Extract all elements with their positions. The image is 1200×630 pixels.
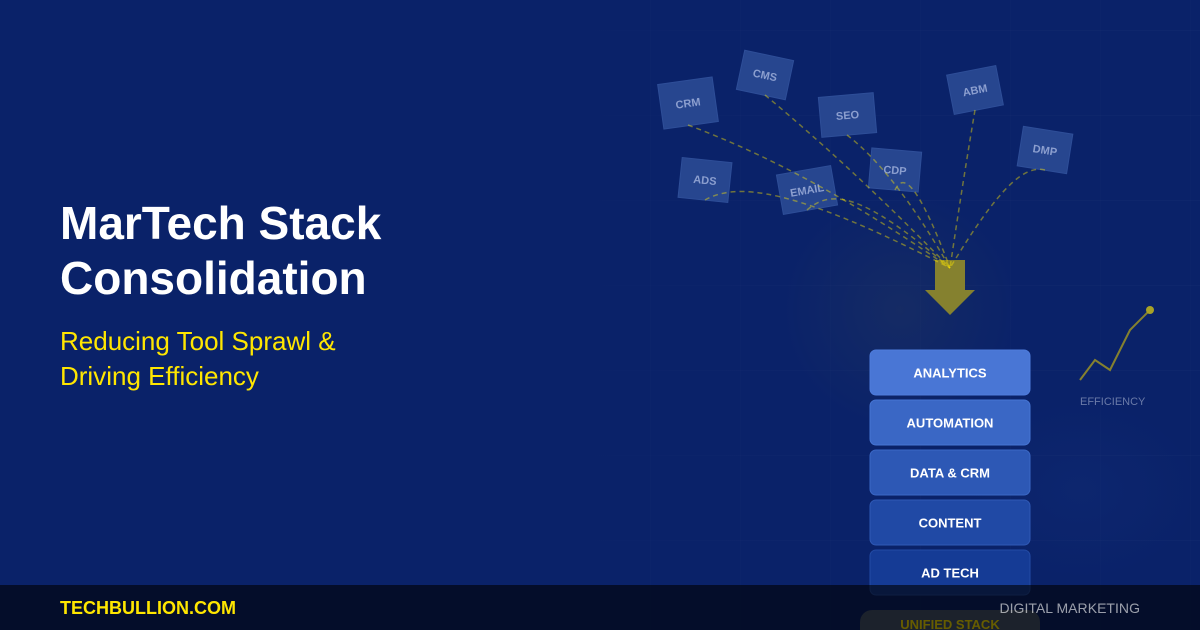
layer: DATA & CRM: DATA & CRM — [910, 466, 990, 480]
layer: ANALYTICS: ANALYTICS — [913, 366, 987, 380]
tag: SEO — [818, 93, 877, 137]
tag: SEO: SEO — [835, 109, 860, 123]
tag: ABM — [947, 66, 1003, 114]
tag: EMAIL: EMAIL — [789, 182, 825, 200]
tag: EMAIL — [776, 166, 838, 214]
subtitle: Driving Efficiency — [60, 361, 259, 391]
tag: ADS — [678, 157, 732, 203]
layer: CONTENT: CONTENT — [919, 516, 981, 530]
badge: UNIFIED STACK — [860, 610, 1040, 630]
icon: consolidation arrow — [925, 260, 975, 315]
title: Consolidation — [60, 252, 367, 304]
title: MarTech Stack — [60, 197, 381, 249]
tag: CRM: CRM — [675, 96, 701, 112]
tool tags scattered — [658, 50, 1073, 214]
category label: DIGITAL MARKETING — [999, 600, 1140, 616]
chart: efficiency trend: EFFICIENCY — [1080, 396, 1146, 408]
tag: DMP: DMP — [1032, 143, 1058, 159]
layer: CONTENT — [870, 500, 1030, 545]
footer bar — [0, 585, 1200, 630]
tag: DMP — [1017, 126, 1073, 174]
layer: ANALYTICS — [870, 350, 1030, 395]
layer: DATA & CRM — [870, 450, 1030, 495]
subtitle — [60, 326, 336, 391]
layer: AD TECH — [870, 550, 1030, 595]
tag: CDP: CDP — [883, 164, 907, 178]
tag: CDP — [868, 148, 922, 192]
layer: AUTOMATION — [870, 400, 1030, 445]
tag: CRM — [658, 77, 718, 129]
chart: efficiency trend — [1080, 306, 1154, 408]
layer: AUTOMATION: AUTOMATION — [907, 416, 993, 430]
dashed connector lines — [688, 95, 1045, 268]
subtitle: Reducing Tool Sprawl & — [60, 326, 336, 356]
tag: CMS: CMS — [752, 68, 778, 84]
tag: ABM: ABM — [962, 83, 989, 99]
tag: CMS — [736, 50, 794, 100]
stack: unified layers — [870, 350, 1030, 595]
tag: ADS: ADS — [693, 174, 717, 188]
layer: AD TECH: AD TECH — [921, 566, 979, 580]
title — [60, 197, 382, 304]
brand: TECHBULLION.COM — [60, 598, 236, 618]
